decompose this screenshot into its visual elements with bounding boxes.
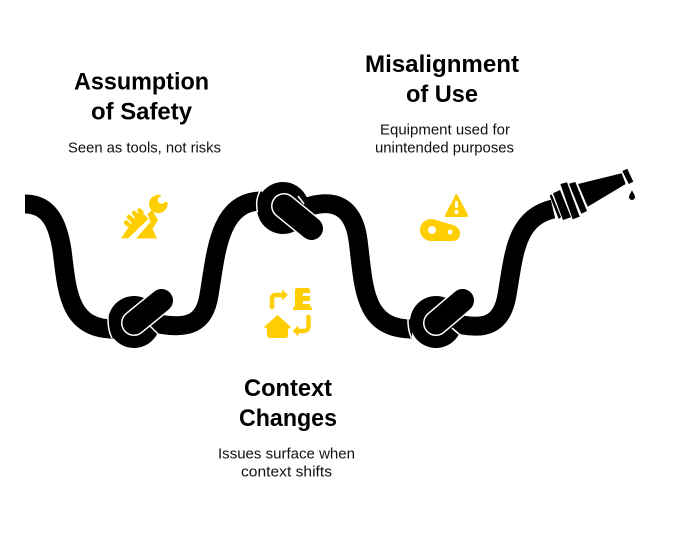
knot 2 <box>257 182 312 234</box>
heading: Context Changes: Context <box>244 375 332 402</box>
heading: Assumption of Safety <box>74 68 209 126</box>
hose segment 2 <box>150 201 262 326</box>
icon: warning and broken tool <box>420 194 468 241</box>
hose segment 3 <box>295 204 412 329</box>
hose segment 4 <box>450 209 553 326</box>
arm and fist <box>121 213 148 238</box>
heading: Misalignment of Use: of Use <box>406 81 478 108</box>
text: Issues surface: Issues surface when <box>218 446 355 462</box>
heading: Misalignment of Use <box>365 51 519 108</box>
wrench head <box>149 195 168 213</box>
text: Seen as tools: Seen as tools, not risks <box>68 140 221 156</box>
text: Issues surface <box>218 446 355 480</box>
heading: Context Changes <box>239 375 337 432</box>
heading: Assumption of Safety: Assumption <box>74 68 209 96</box>
heading: Context Changes: Changes <box>239 405 337 432</box>
icon: arrows, house and document <box>264 288 312 338</box>
heading: Assumption of Safety: of Safety <box>91 98 193 126</box>
knot 1 <box>108 296 162 348</box>
text: Issues surface: context shifts <box>241 464 332 480</box>
body <box>136 210 158 238</box>
hose nozzle <box>550 169 635 220</box>
heading: Misalignment of Use: Misalignment <box>365 51 519 78</box>
text: Equipment used: unintended purposes <box>375 140 514 156</box>
tool plate <box>420 219 460 241</box>
text: Equipment used <box>375 122 514 156</box>
hose segment 1 <box>25 204 114 329</box>
icon: fist and wrench <box>121 193 169 238</box>
fingers <box>126 210 142 224</box>
hose with knots and nozzle <box>25 169 635 348</box>
warning triangle <box>445 194 468 217</box>
text: Equipment used: Equipment used for <box>380 122 510 138</box>
knot 3 <box>408 296 462 348</box>
